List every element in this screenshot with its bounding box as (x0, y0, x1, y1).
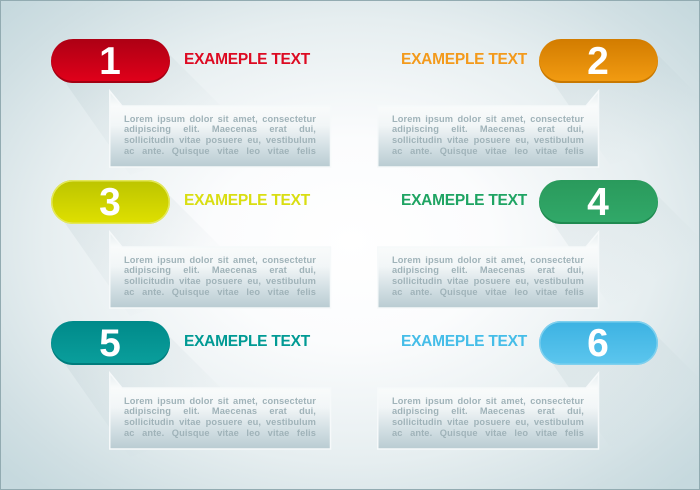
section 3 (51, 180, 331, 308)
heading 1: EXAMEPLE TEXT (184, 51, 310, 68)
body text 2 (392, 114, 584, 156)
number pill 4 (539, 180, 658, 224)
body text 3: Lorem ipsum dolor sit amet, consectetur (124, 254, 316, 264)
body text 4 (392, 254, 584, 297)
body text 6: Lorem ipsum dolor sit amet, consectetur (392, 396, 584, 406)
body text 1: sollicitudin vitae posuere eu, vestibulum (124, 135, 316, 145)
callout 5 (109, 371, 331, 450)
body text 6: ac ante. Quisque vitae leo vitae felis (392, 428, 584, 438)
body text 5: Lorem ipsum dolor sit amet, consectetur (124, 396, 316, 406)
body text 2: adipiscing elit. Maecenas erat dui, (392, 124, 584, 134)
body text 3 (124, 254, 316, 297)
body text 2: Lorem ipsum dolor sit amet, consectetur (392, 114, 584, 124)
body text 3: sollicitudin vitae posuere eu, vestibulum (124, 276, 316, 286)
callout 2 (378, 89, 600, 168)
body text 5: sollicitudin vitae posuere eu, vestibulum (124, 417, 316, 427)
number pill 5: 5 (99, 322, 121, 365)
heading 3: EXAMEPLE TEXT (184, 192, 310, 209)
heading 2: EXAMEPLE TEXT (401, 51, 527, 68)
body text 1: Lorem ipsum dolor sit amet, consectetur (124, 114, 316, 124)
heading 5: EXAMEPLE TEXT (184, 333, 310, 350)
number pill 3 (51, 180, 170, 224)
body text 1: ac ante. Quisque vitae leo vitae felis (124, 146, 316, 156)
callout 4 (378, 230, 600, 308)
body text 6: adipiscing elit. Maecenas erat dui, (392, 406, 584, 416)
body text 3: ac ante. Quisque vitae leo vitae felis (124, 287, 316, 297)
body text 1: adipiscing elit. Maecenas erat dui, (124, 124, 316, 134)
number pill 1: 1 (99, 40, 121, 83)
section 5 (51, 321, 331, 450)
section 1 (51, 39, 330, 168)
number pill 6: 6 (587, 322, 609, 365)
callout 6 (377, 371, 600, 450)
number pill 6 (539, 321, 658, 365)
body text 4: adipiscing elit. Maecenas erat dui, (392, 265, 584, 275)
callout 3 (109, 230, 331, 308)
callout 1 (109, 89, 330, 168)
body text 6 (392, 396, 584, 438)
number pill 5 (51, 321, 170, 365)
body text 4: sollicitudin vitae posuere eu, vestibulum (392, 276, 584, 286)
body text 2: ac ante. Quisque vitae leo vitae felis (392, 146, 584, 156)
body text 5: ac ante. Quisque vitae leo vitae felis (124, 428, 316, 438)
body text 5 (124, 396, 316, 438)
number pill 2: 2 (587, 40, 609, 83)
section 2 (378, 39, 658, 168)
body text 1 (124, 114, 316, 156)
section 6 (377, 321, 658, 450)
body text 5: adipiscing elit. Maecenas erat dui, (124, 406, 316, 416)
number pill 3: 3 (99, 181, 121, 224)
section 4 (378, 180, 658, 308)
heading 6: EXAMEPLE TEXT (401, 333, 527, 350)
body text 3: adipiscing elit. Maecenas erat dui, (124, 265, 316, 275)
number pill 1 (51, 39, 170, 83)
number pill 4: 4 (587, 181, 609, 224)
body text 4: Lorem ipsum dolor sit amet, consectetur (392, 254, 584, 264)
body text 2: sollicitudin vitae posuere eu, vestibulum (392, 135, 584, 145)
heading 4: EXAMEPLE TEXT (401, 192, 527, 209)
body text 6: sollicitudin vitae posuere eu, vestibulum (392, 417, 584, 427)
body text 4: ac ante. Quisque vitae leo vitae felis (392, 287, 584, 297)
number pill 2 (539, 39, 658, 83)
